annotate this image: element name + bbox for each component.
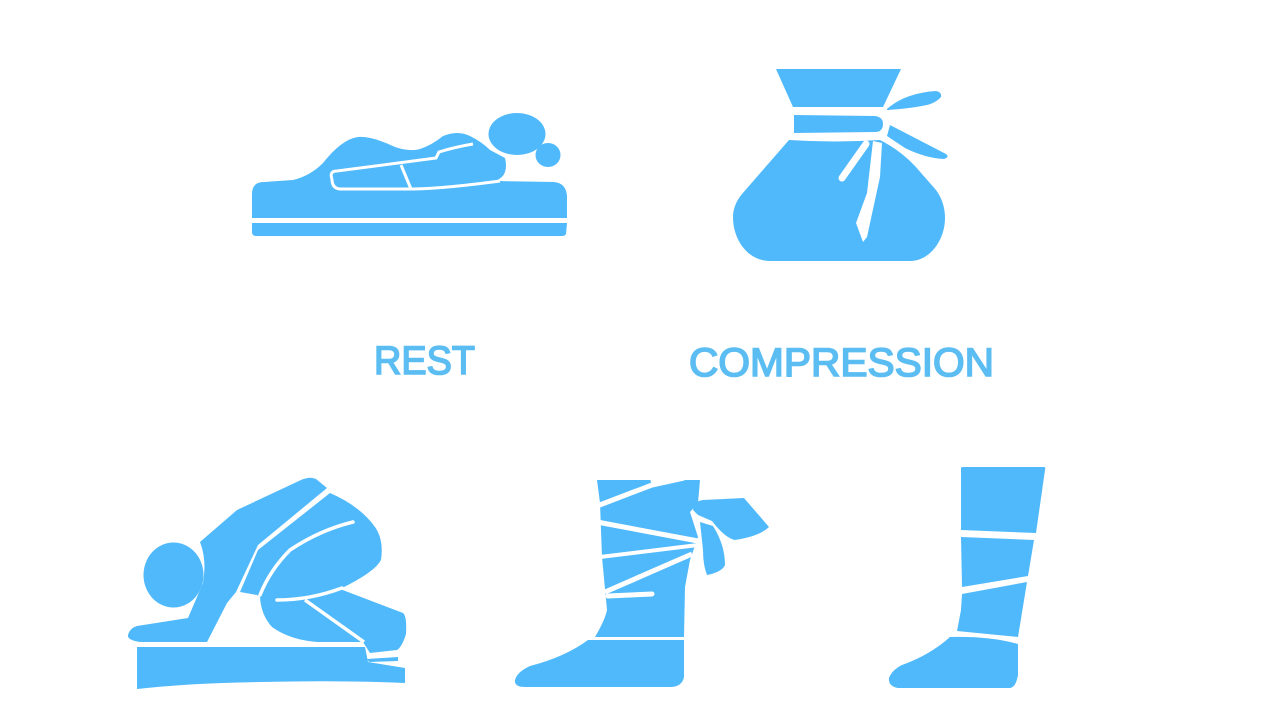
icon: person resting on a mattress — [252, 113, 567, 236]
icon: compression bag tied with ribbon — [733, 69, 948, 261]
icon: compression sock — [889, 467, 1045, 688]
icon: person kneeling on a mat — [128, 478, 406, 689]
icon: bandaged boot with bow — [515, 478, 769, 687]
label: COMPRESSION: COMPRESSION — [689, 341, 994, 385]
label: REST: REST — [374, 339, 475, 383]
